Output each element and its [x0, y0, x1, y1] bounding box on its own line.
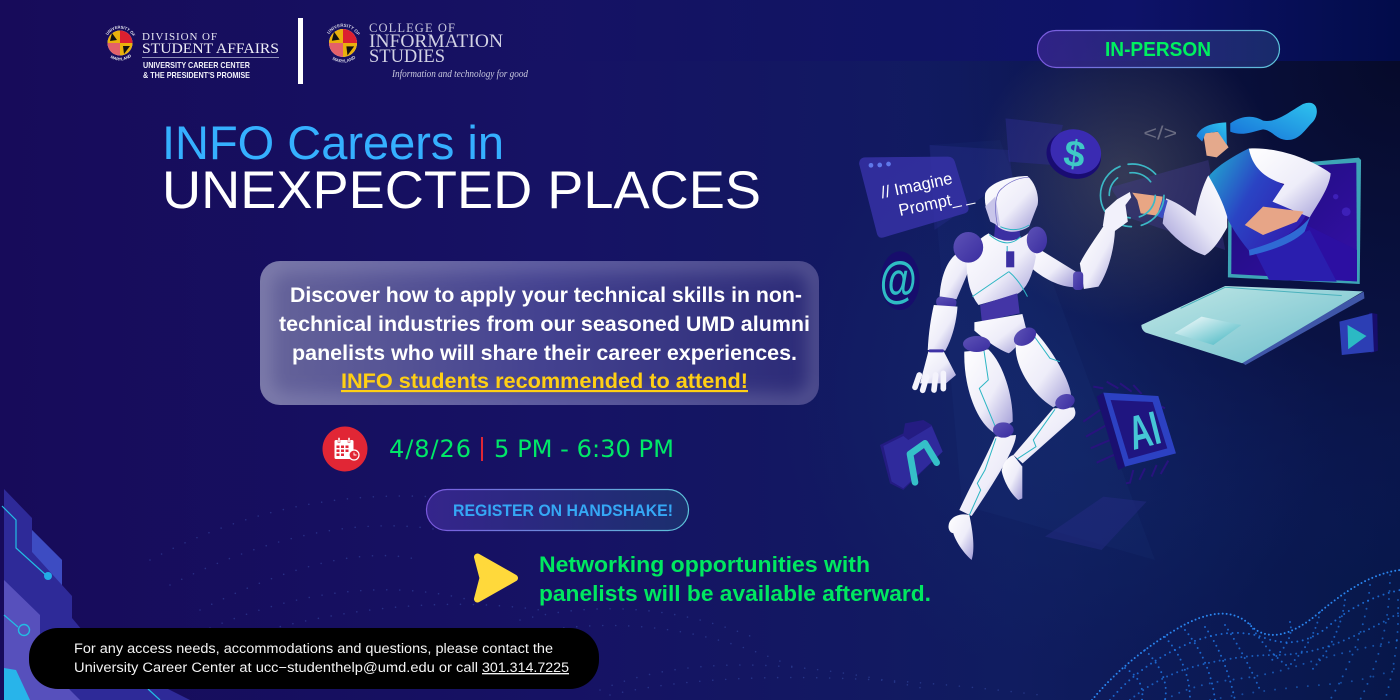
robot foot [948, 514, 973, 560]
logo: college of information studies: INFORMATION [369, 31, 503, 52]
seal: university of maryland: UNIVERSITY OF [106, 26, 136, 36]
description text: panelists who will share their career experiences. [292, 341, 797, 365]
description text: technical industries from our seasoned UMD alumni [279, 312, 810, 336]
light beam [1110, 160, 1225, 250]
icon: folder [880, 420, 943, 490]
panel: imagine prompt: // Imagine [879, 169, 954, 202]
focus rings [1100, 164, 1164, 227]
logo: college of information studies: STUDIES [369, 46, 445, 67]
illustration: upper half [859, 103, 1378, 365]
panel: description [260, 261, 819, 405]
icon: dollar coin: $ [1061, 132, 1088, 176]
seal: university of maryland [106, 26, 136, 60]
date and time [389, 435, 674, 463]
icon: yellow arrow [478, 557, 514, 599]
title: INFO Careers in [162, 116, 504, 169]
logo: college of information studies: Information and technology for good [391, 69, 529, 80]
icon: at sign: @ [880, 253, 917, 308]
robot left leg [959, 336, 1016, 517]
logo: division of student affairs: DIVISION OF [142, 31, 217, 43]
networking note: panelists will be available afterward. [539, 581, 931, 606]
date and time: 4/8/26 [389, 435, 471, 463]
robot right leg [1002, 324, 1077, 500]
contact bar: 301.314.7225 [482, 660, 569, 675]
badge: in-person: IN-PERSON [1105, 39, 1211, 61]
laptop base [1141, 286, 1364, 365]
icon: play button [1339, 313, 1378, 355]
contact bar: University Career Center at ucc−studenthelp@umd.edu or call [74, 660, 478, 675]
networking note: Networking opportunities with [539, 552, 870, 577]
logo: division of student affairs [106, 26, 279, 80]
logo: college of information studies [326, 21, 529, 80]
description text: INFO students recommended to attend! [341, 369, 748, 393]
seal: university of maryland: UNIVERSITY OF [326, 24, 360, 35]
person [1132, 103, 1337, 282]
logo divider [298, 18, 303, 84]
icon: ai chip [1083, 382, 1176, 483]
contact bar [29, 628, 599, 689]
contact bar: For any access needs, accommodations and questions, please contact the [74, 641, 553, 656]
icon: calendar [322, 426, 368, 472]
icon: ai chip: AI [1123, 402, 1166, 460]
date and time: 5 PM - 6:30 PM [494, 435, 674, 463]
description text [279, 283, 810, 393]
circuit graphic: bottom left [2, 489, 190, 700]
button: register on handshake [426, 490, 688, 530]
floor panel [1045, 497, 1147, 550]
title [162, 116, 761, 220]
panel: imagine prompt: Prompt_ _ [897, 185, 976, 220]
logo: division of student affairs: UNIVERSITY CAREER CENTER [143, 60, 250, 70]
faint particle field [150, 496, 1040, 695]
networking note [539, 552, 931, 606]
laptop [1228, 158, 1361, 284]
robot hand [915, 349, 956, 390]
illustration: lower half [880, 324, 1176, 560]
badge: in-person [1038, 30, 1280, 68]
logo: division of student affairs: STUDENT AFFAIRS [142, 41, 279, 57]
robot upper body [928, 176, 1131, 353]
dotted wave: bottom right [1092, 570, 1400, 700]
icon: dollar coin [1040, 122, 1108, 186]
description text: Discover how to apply your technical skills in non- [290, 283, 802, 307]
seal: university of maryland: MARYLAND [110, 54, 131, 60]
seal: university of maryland [326, 24, 360, 63]
title: UNEXPECTED PLACES [162, 161, 761, 220]
logo: college of information studies: COLLEGE OF [369, 21, 455, 35]
logo: division of student affairs: & THE PRESIDENT'S PROMISE [143, 70, 250, 80]
button: register on handshake: REGISTER ON HANDSHAKE! [453, 502, 673, 520]
panel: imagine prompt [859, 157, 976, 238]
translucent window [1005, 118, 1063, 165]
icon: code tag: </> [1143, 122, 1177, 144]
seal: university of maryland: MARYLAND [332, 56, 356, 63]
